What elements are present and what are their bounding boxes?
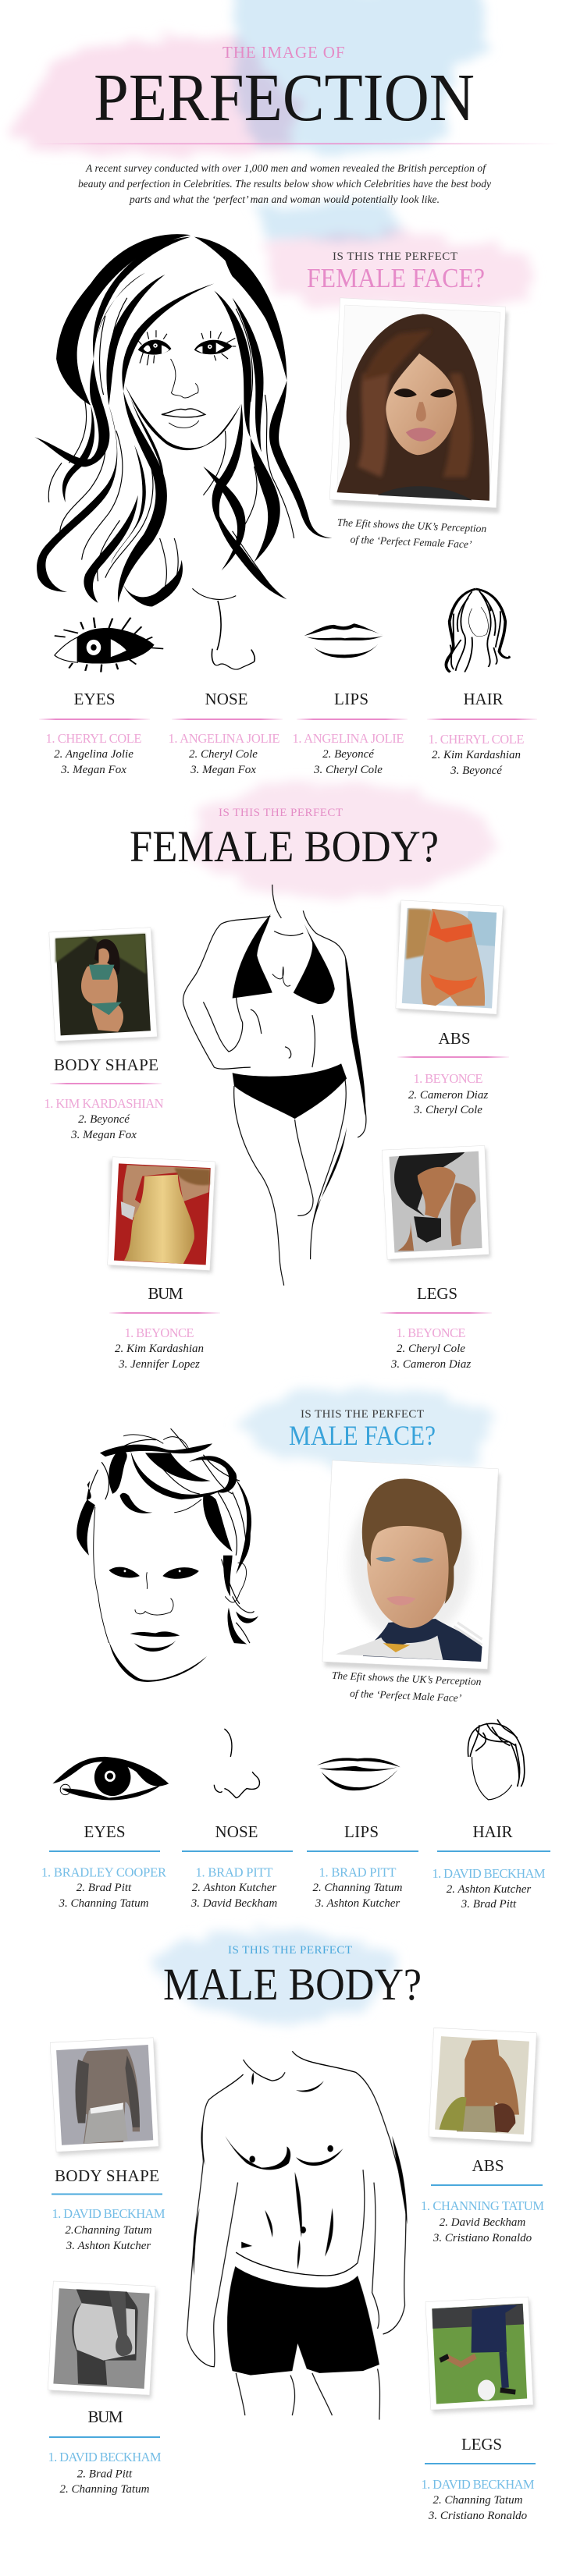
column: female hair: 3. Beyoncé — [450, 765, 503, 777]
photo: body shape female — [49, 928, 159, 1044]
icon: male hair — [468, 1719, 525, 1800]
column: female bum: 2. Kim Kardashian — [115, 1343, 204, 1355]
column: female eyes: 1. CHERYL COLE — [45, 731, 142, 746]
column: male nose: 2. Ashton Kutcher — [192, 1882, 276, 1894]
illustration: female body — [183, 885, 366, 1286]
icon: female eye — [55, 618, 163, 672]
illustration: male face line drawing — [77, 1428, 258, 1682]
column: female abs — [397, 1029, 509, 1116]
column: female eyes: EYES — [73, 690, 116, 708]
caption: female efit: of the ‘Perfect Female Face’ — [350, 534, 472, 550]
column: male hair: 1. DAVID BECKHAM — [433, 1866, 546, 1881]
column: male nose — [182, 1822, 293, 1910]
intro paragraph: beauty and perfection in Celebrities. The results below show which Celebrities have the best body — [78, 178, 491, 190]
illustration: female face line drawing — [34, 234, 332, 606]
column: female bum — [109, 1284, 220, 1371]
column: female hair: HAIR — [464, 690, 503, 708]
icon: male lips — [317, 1758, 400, 1790]
column: female legs: LEGS — [417, 1284, 457, 1303]
photo: bum female — [108, 1157, 217, 1273]
female face parts — [55, 589, 509, 672]
column: female lips: 2. Beyoncé — [322, 748, 375, 761]
column: female hair: 1. CHERYL COLE — [428, 732, 525, 747]
caption: female efit: The Efit shows the UK’s Perception — [336, 516, 487, 534]
column: male hair: HAIR — [473, 1822, 512, 1841]
sub heading: is this the perfect male face: IS THIS THE PERFECT — [301, 1408, 425, 1421]
column: male nose: NOSE — [215, 1822, 258, 1841]
column: male hair: 2. Ashton Kutcher — [447, 1883, 531, 1896]
intro paragraph: A recent survey conducted with over 1,000 men and women revealed the British perception of — [85, 162, 487, 174]
male face parts — [52, 1719, 525, 1800]
column: female abs: ABS — [439, 1029, 470, 1048]
intro paragraph — [78, 162, 491, 205]
heading: male body: MALE BODY? — [163, 1959, 422, 2010]
column: male abs: 1. CHANNING TATUM — [421, 2198, 544, 2213]
column: male nose: 1. BRAD PITT — [195, 1865, 273, 1880]
column: female body shape: 2. Beyoncé — [78, 1113, 130, 1126]
column: female body shape: 3. Megan Fox — [70, 1129, 137, 1141]
column: female body shape: BODY SHAPE — [54, 1056, 158, 1074]
column: male lips: 2. Channing Tatum — [313, 1882, 403, 1894]
column: male eyes: 2. Brad Pitt — [77, 1882, 132, 1894]
photo: legs female — [382, 1145, 491, 1262]
face features — [125, 385, 241, 450]
photo: legs male — [425, 2297, 535, 2413]
column: male bum: 2. Channing Tatum — [60, 2483, 150, 2496]
column: female body shape — [44, 1056, 164, 1141]
photo: bum male — [48, 2281, 157, 2398]
watercolour washes — [8, 0, 531, 2024]
column: male abs: 2. David Beckham — [440, 2216, 525, 2229]
column: female bum: BUM — [148, 1284, 183, 1303]
photo: perfect male face efit — [322, 1460, 500, 1674]
column: male hair — [433, 1822, 550, 1911]
column: male legs: 3. Cristiano Ronaldo — [428, 2510, 528, 2522]
column: male eyes: 1. BRADLEY COOPER — [41, 1865, 166, 1880]
column: male abs: ABS — [472, 2156, 504, 2175]
column: male abs — [421, 2156, 544, 2244]
column: male lips: LIPS — [344, 1822, 379, 1841]
column: female nose: NOSE — [205, 690, 248, 708]
column: female abs: 1. BEYONCE — [414, 1071, 482, 1086]
column: male body shape: 3. Ashton Kutcher — [66, 2240, 151, 2252]
column: female lips: 3. Cheryl Cole — [313, 764, 383, 776]
column: male body shape: 1. DAVID BECKHAM — [52, 2206, 166, 2221]
heading: female body: FEMALE BODY? — [130, 822, 439, 871]
column: male body shape: 2.Channing Tatum — [65, 2224, 152, 2237]
column: male legs: 2. Channing Tatum — [433, 2494, 523, 2507]
photo: perfect female face efit — [329, 298, 508, 513]
sub heading: is this the perfect male body: IS THIS THE PERFECT — [228, 1944, 353, 1957]
column: male eyes: 3. Channing Tatum — [59, 1897, 149, 1910]
column: female bum: 1. BEYONCE — [125, 1325, 194, 1340]
illustration: male body — [187, 2051, 408, 2420]
column: female legs: 1. BEYONCE — [397, 1325, 465, 1340]
column: male bum: 2. Brad Pitt — [77, 2468, 133, 2481]
photo: abs female — [396, 900, 504, 1017]
column: female abs: 3. Cheryl Cole — [413, 1104, 482, 1116]
main title: PERFECTION — [94, 59, 475, 135]
title kicker: THE IMAGE OF — [222, 43, 346, 62]
caption: male efit: The Efit shows the UK’s Perception — [332, 1669, 482, 1687]
column: female hair — [427, 690, 537, 777]
column: male abs: 3. Cristiano Ronaldo — [433, 2232, 532, 2244]
column: female body shape: 1. KIM KARDASHIAN — [44, 1096, 164, 1111]
column: male body shape: BODY SHAPE — [55, 2166, 159, 2185]
column: male lips: 3. Ashton Kutcher — [315, 1897, 400, 1910]
column: male eyes: EYES — [84, 1822, 125, 1841]
column: male bum — [48, 2407, 162, 2496]
photo: abs male — [429, 2028, 539, 2145]
column: male lips — [307, 1822, 418, 1910]
column: female legs: 3. Cameron Diaz — [390, 1358, 471, 1371]
column: female legs: 2. Cheryl Cole — [397, 1343, 465, 1355]
icon: male nose — [214, 1729, 259, 1797]
column: female nose: 1. ANGELINA JOLIE — [169, 731, 279, 746]
column: male lips: 1. BRAD PITT — [319, 1865, 397, 1880]
title block — [94, 43, 475, 135]
column: female lips: LIPS — [334, 690, 368, 708]
column: female nose: 2. Cheryl Cole — [189, 748, 258, 761]
column: male legs: LEGS — [461, 2435, 502, 2454]
column: female eyes: 2. Angelina Jolie — [54, 748, 133, 761]
column: female abs: 2. Cameron Diaz — [408, 1089, 488, 1102]
column: female bum: 3. Jennifer Lopez — [118, 1358, 200, 1371]
sub heading: is this the perfect female: IS THIS THE PERFECT — [219, 807, 344, 819]
icon: female nose — [212, 601, 255, 669]
intro paragraph: parts and what the ‘perfect’ man and woman would potentially look like. — [129, 193, 440, 205]
photo: body shape male — [50, 2038, 161, 2156]
icon: female hair — [446, 589, 509, 672]
icon: male eye — [52, 1757, 169, 1800]
column: female legs — [380, 1284, 492, 1371]
caption: male efit — [331, 1669, 482, 1705]
sub heading: is this the perfect: IS THIS THE PERFECT — [333, 250, 458, 263]
column: male bum: 1. DAVID BECKHAM — [48, 2450, 162, 2464]
column: female eyes — [39, 690, 150, 776]
heading: male face: MALE FACE? — [289, 1420, 436, 1451]
column: female hair: 2. Kim Kardashian — [432, 749, 521, 761]
column: female lips — [292, 690, 408, 776]
column: female nose — [169, 690, 283, 776]
heading: female face: FEMALE FACE? — [307, 263, 485, 293]
caption: female efit — [336, 516, 487, 551]
column: male hair: 3. Brad Pitt — [461, 1898, 517, 1911]
icon: female lips — [304, 623, 384, 658]
extra fine hair strands — [48, 298, 294, 599]
column: male legs: 1. DAVID BECKHAM — [422, 2477, 535, 2492]
caption: male efit: of the ‘Perfect Male Face’ — [350, 1687, 462, 1704]
column: female lips: 1. ANGELINA JOLIE — [292, 731, 404, 746]
column: male bum: BUM — [87, 2407, 123, 2426]
column: male eyes — [41, 1822, 166, 1910]
column: female nose: 3. Megan Fox — [190, 764, 256, 776]
column: male legs — [422, 2435, 536, 2522]
column: female eyes: 3. Megan Fox — [60, 764, 126, 776]
column: male body shape — [52, 2166, 166, 2252]
column: male nose: 3. David Beckham — [190, 1897, 277, 1910]
